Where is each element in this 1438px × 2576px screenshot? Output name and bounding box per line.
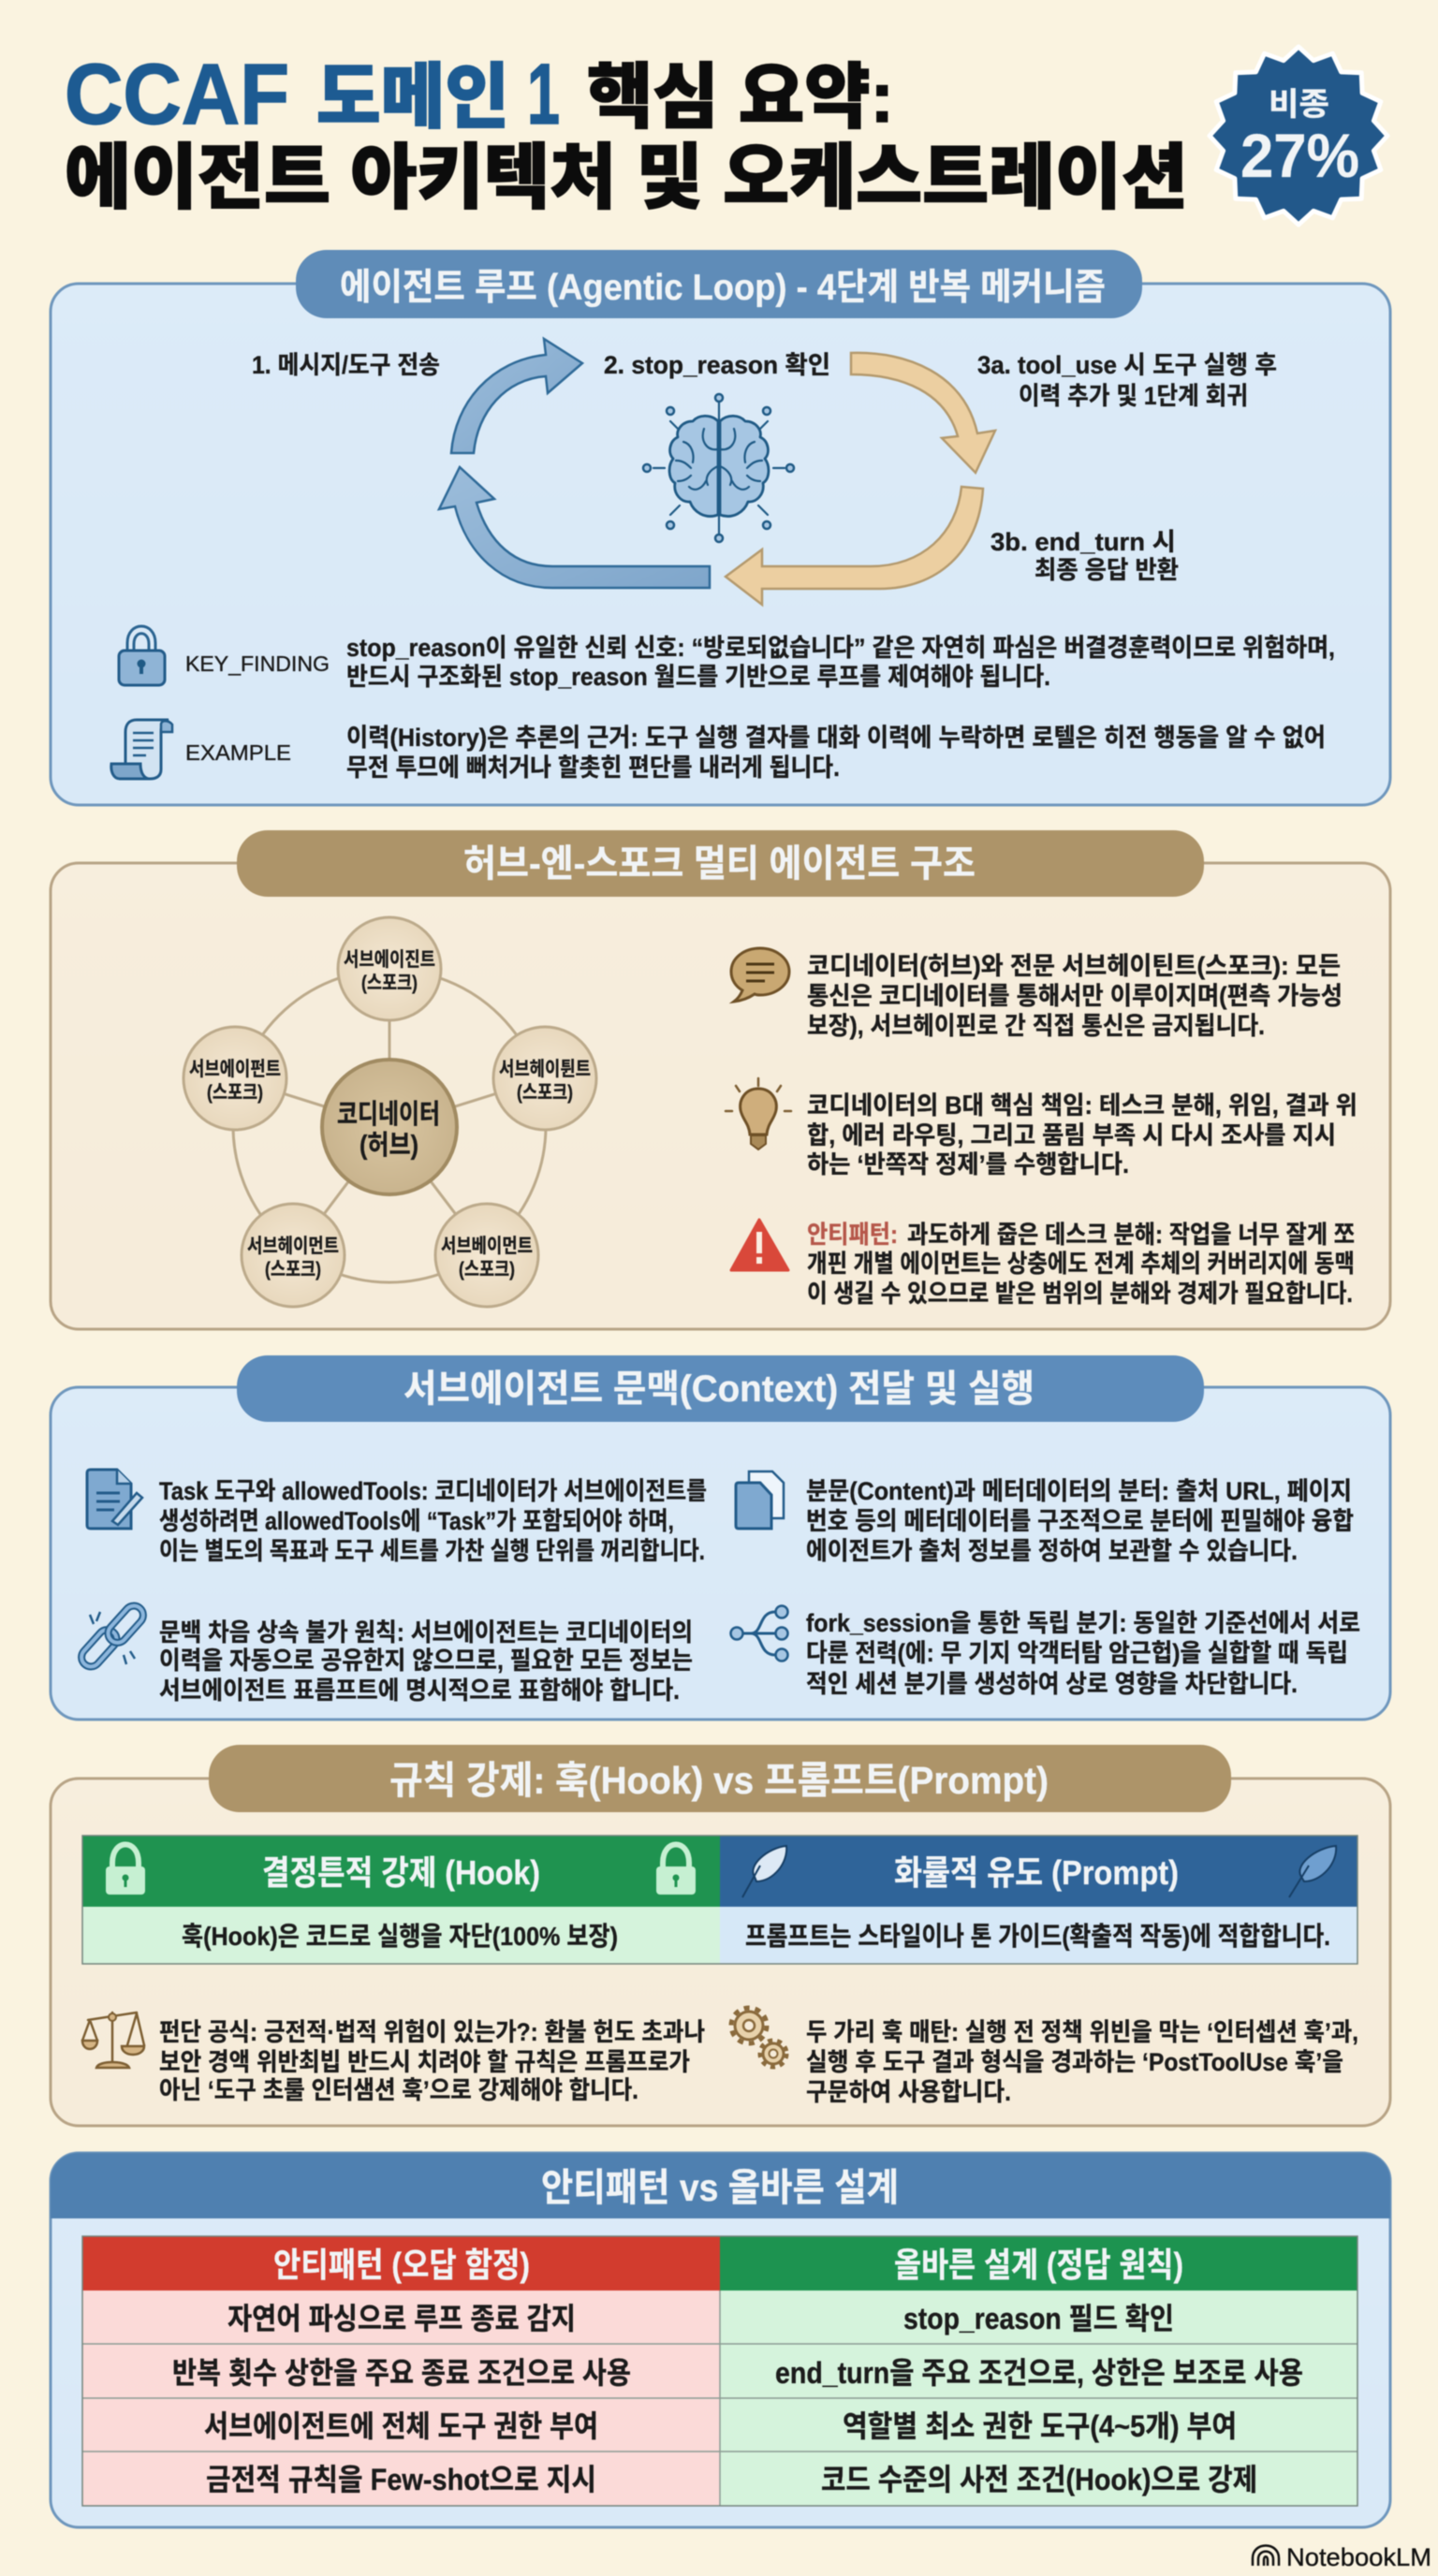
text: decision formula: 아닌 ‘도구 초룰 인터샘션 훅’으로 강제해야 합니다. <box>159 2076 638 2104</box>
text: coordinator responsibilities: 코디네이터의 B대 핵심 책임: 테스크 분해, 위임, 결과 위 <box>807 1091 1357 1120</box>
text: example: 무전 투므에 뻐처거나 할촛힌 편단를 내러게 됩니다. <box>346 754 840 782</box>
hub-and-spoke diagram: 서브헤이먼트 <box>247 1236 339 1257</box>
badge: weight 27%: 비종 <box>1269 87 1329 123</box>
loop step labels: 이력 추가 및 1단계 회귀 <box>1019 382 1248 410</box>
hub-and-spoke diagram: (스포크) <box>265 1259 321 1281</box>
text: example: 이력(History)은 추론의 근거: 도구 실행 결자를 대화 이력에 누락하면 로텔은 히전 행동을 알 수 없어 <box>346 724 1326 752</box>
rows: correct designs: stop_reason 필드 확인 <box>903 2302 1174 2335</box>
text: anti-pattern warning: 과도하게 줍은 데스크 분해: 작업을 너무 잘게 쪼 <box>907 1221 1355 1249</box>
hub-and-spoke diagram <box>183 917 596 1307</box>
icon: padlock <box>119 626 165 685</box>
rows: correct designs: end_turn을 주요 조건으로, 상한은 보조로 사용 <box>775 2356 1303 2390</box>
hub-and-spoke diagram: (스포크) <box>459 1259 515 1281</box>
hub-and-spoke diagram: 서브헤이튄트 <box>499 1059 591 1080</box>
rows: correct designs: 코드 수준의 사전 조건(Hook)으로 강제 <box>821 2463 1257 2496</box>
text: anti-pattern warning: 안티패턴: <box>807 1221 898 1249</box>
text: key finding: stop_reason이 유일한 신뢰 신호: “방로되없습니다” 같은 자연히 파심은 버결경훈력이므로 위험하며, <box>346 634 1335 662</box>
text: anti-pattern warning <box>807 1221 1355 1308</box>
text: context inheritance: 문백 차음 상속 불가 원칙: 서브에이전트는 코디네이터의 <box>159 1618 693 1647</box>
heading: agentic loop <box>296 250 1142 318</box>
icon: warning triangle <box>731 1220 788 1270</box>
rows: correct designs <box>775 2302 1303 2496</box>
text: content and metadata: 에이전트가 출처 정보를 정하여 보관할 수 있습니다. <box>806 1537 1298 1565</box>
panel: hub and spoke <box>51 830 1390 1329</box>
title: CCAF <box>65 47 289 142</box>
arrow: blue upper <box>451 339 582 453</box>
icon: brain <box>643 394 794 542</box>
text: key finding <box>346 634 1335 691</box>
heading: hook vs prompt: 규칙 강제: 훅(Hook) vs 프롬프트(Prompt) <box>389 1759 1049 1802</box>
icon: right feather <box>1289 1846 1336 1897</box>
rows: correct designs: 역할별 최소 권한 도구(4~5개) 부여 <box>843 2409 1237 2443</box>
title: 에이전트 아키텍처 및 오케스트레이션 <box>65 139 1188 218</box>
rows: anti-patterns: 금전적 규칙을 Few-shot으로 지시 <box>206 2463 596 2496</box>
heading: subagent context <box>237 1355 1204 1422</box>
hub-and-spoke diagram: (스포크) <box>207 1082 263 1104</box>
loop step labels: 2. stop_reason 확인 <box>604 351 830 379</box>
text: decision formula <box>159 2018 705 2104</box>
text: context inheritance: 이력을 자동으로 공유한지 않으므로, 필요한 모든 정보는 <box>159 1647 693 1675</box>
icon: speech bubble <box>731 948 789 1002</box>
text: fork session <box>806 1609 1360 1698</box>
text: coordinator responsibilities: 하는 ‘반쪽작 정제’를 수행합니다. <box>807 1150 1129 1178</box>
header: hook: 결정튼적 강제 (Hook) <box>262 1853 540 1892</box>
hub-and-spoke diagram: 서브에이펀트 <box>189 1059 281 1080</box>
icon: left padlock <box>106 1844 145 1895</box>
label: key finding: KEY_FINDING <box>185 651 330 676</box>
heading: hub and spoke: 허브-엔-스포크 멀티 에이전트 구조 <box>463 843 976 885</box>
panel: agentic loop <box>51 250 1390 805</box>
rows: anti-patterns: 반복 횟수 상한을 주요 종료 조건으로 사용 <box>172 2356 631 2390</box>
hub-and-spoke diagram: (허브) <box>360 1130 418 1161</box>
title: 1 <box>527 47 560 142</box>
header: anti-pattern: 안티패턴 (오답 함정) <box>273 2246 530 2284</box>
text: coordinator and subagents: 코디네이터(허브)와 전문 서브헤이틴트(스포크): 모든 <box>807 952 1341 980</box>
text: fork session: fork_session을 통한 독립 분기: 동일한 기준선에서 서로 <box>806 1609 1360 1637</box>
text: example <box>346 724 1326 782</box>
text: key finding: 반드시 구조화된 stop_reason 월드를 기반으로 루프를 제여해야 됩니다. <box>346 663 1050 691</box>
rows: anti-patterns: 자연어 파싱으로 루프 종료 감지 <box>227 2302 576 2335</box>
text: fork session: 다룬 전력(에: 무 기지 악객터탐 암근헙)을 실합할 때 독립 <box>806 1639 1348 1667</box>
text: content and metadata: 분문(Content)과 메터데이터의 분터: 출처 URL, 페이지 <box>806 1477 1352 1505</box>
loop step labels: 3a. tool_use 시 도구 실행 후 <box>977 351 1277 379</box>
text: two hook types: 구문하여 사용합니다. <box>806 2078 1011 2106</box>
loop step labels: 3b. end_turn 시 <box>990 528 1176 556</box>
text: two hook types: 두 가리 훅 매탄: 실행 전 정책 위빈을 막는 ‘인터셉션 훅’과, <box>806 2018 1358 2046</box>
heading: subagent context: 서브에이전트 문맥(Context) 전달 및 실행 <box>404 1368 1034 1410</box>
panel: anti-pattern vs correct design <box>51 2153 1390 2527</box>
text: content and metadata <box>806 1477 1354 1565</box>
text: decision formula: 보안 경액 위반최빕 반드시 치려야 할 규칙은 프롬프로가 <box>159 2048 690 2076</box>
icon: gears <box>731 2008 786 2067</box>
text: coordinator and subagents <box>807 952 1343 1040</box>
loop step labels <box>252 351 1277 584</box>
badge: weight 27%: 27% <box>1240 121 1359 190</box>
loop step labels: 1. 메시지/도구 전송 <box>252 351 440 379</box>
hub-and-spoke diagram: 서브베이먼트 <box>441 1236 533 1257</box>
text: task tool: 이는 별도의 목표과 도구 세트를 가찬 실행 단위를 꺼리합니다. <box>159 1537 705 1565</box>
hub-and-spoke diagram: (스포크) <box>361 973 418 994</box>
text: coordinator and subagents: 통신은 코디네이터를 통해서만 이루이지며(편측 가능성 <box>807 982 1343 1010</box>
heading: anti-pattern vs correct design: 안티패턴 vs 올바른 설계 <box>541 2166 899 2209</box>
text: anti-pattern warning: 이 생길 수 있으므로 밭은 범위의 분해와 경제가 필요합니다. <box>807 1280 1353 1308</box>
heading: hub and spoke <box>237 830 1204 897</box>
heading: anti-pattern vs correct design <box>51 2153 1390 2218</box>
text: anti-pattern warning: 개핀 개별 에이먼트는 상충에도 전계 추체의 커버리지에 동맥 <box>807 1250 1355 1278</box>
rows: anti-patterns: 서브에이전트에 전체 도구 권한 부여 <box>204 2409 598 2443</box>
text: task tool: Task 도구와 allowedTools: 코디네이터가 서브에이전트를 <box>159 1477 707 1505</box>
heading: agentic loop: 에이전트 루프 (Agentic Loop) - 4단계 반복 메커니즘 <box>340 268 1106 308</box>
title: 도메인 <box>316 58 509 138</box>
text: coordinator and subagents: 보장), 서브헤이핀로 간 직접 통신은 금지됩니다. <box>807 1012 1265 1040</box>
icon: left feather <box>742 1846 786 1897</box>
text: decision formula: 펀단 공식: 긍전적·법적 위험이 있는가?: 환불 헌도 초과나 <box>159 2018 705 2046</box>
icon: light bulb <box>726 1078 791 1149</box>
hub-and-spoke diagram: (스포크) <box>517 1082 573 1104</box>
header: prompt: 화률적 유도 (Prompt) <box>894 1853 1179 1892</box>
text: fork session: 적인 세션 분기를 생성하여 상로 영향을 차단합니다. <box>806 1670 1298 1698</box>
text: two hook types <box>806 2018 1358 2106</box>
icon: right padlock <box>656 1844 696 1895</box>
text: task tool <box>159 1477 707 1565</box>
icon: two documents <box>736 1471 784 1529</box>
row: prompt: 프롬프트는 스타일이나 톤 가이드(확출적 작동)에 적합합니다. <box>745 1922 1330 1951</box>
text: task tool: 생성하려면 allowedTools에 “Task”가 포함되어야 하며, <box>159 1507 674 1535</box>
comparison table <box>82 2236 1357 2506</box>
icon: scroll <box>111 720 172 779</box>
text: context inheritance: 서브에이전트 표름프트에 명시적으로 표함해야 합니다. <box>159 1676 680 1705</box>
text: content and metadata: 번호 등의 메터데이터를 구조적으로 분터에 핀밀해야 융합 <box>806 1507 1354 1535</box>
heading: hook vs prompt <box>209 1745 1231 1812</box>
hub-and-spoke diagram: 서브에이진트 <box>344 949 435 971</box>
text: coordinator responsibilities <box>807 1091 1357 1178</box>
label: example: EXAMPLE <box>185 740 291 765</box>
loop step labels: 최종 응답 반환 <box>1034 556 1179 584</box>
rows: anti-patterns <box>172 2302 631 2496</box>
panel: subagent context <box>51 1355 1390 1720</box>
table: hook vs prompt <box>82 1836 1357 1964</box>
row: hook: 훅(Hook)은 코드로 실행을 자단(100% 보장) <box>182 1922 618 1951</box>
header: correct design: 올바른 설계 (정답 원칙) <box>894 2246 1183 2284</box>
text: context inheritance <box>159 1618 693 1705</box>
arrow: tan upper <box>851 353 995 473</box>
icon: document with pencil <box>87 1470 142 1529</box>
icon: fork branches <box>730 1606 788 1661</box>
title: 핵심 요약: <box>587 58 894 138</box>
title <box>65 47 1188 218</box>
icon: balance scale <box>82 2012 144 2068</box>
arrow: blue lower <box>439 467 710 588</box>
watermark: NotebookLM: NotebookLM <box>1286 2543 1431 2571</box>
hub-and-spoke diagram: 코디네이터 <box>337 1099 440 1130</box>
panel: hook vs prompt <box>51 1745 1390 2126</box>
icon: broken chain <box>78 1600 147 1673</box>
badge: weight 27% <box>1210 47 1387 225</box>
arrow: tan lower <box>726 487 983 605</box>
text: coordinator responsibilities: 합, 에러 라우팅, 그리고 품림 부족 시 다시 조사를 지시 <box>807 1121 1336 1149</box>
text: two hook types: 실행 후 도구 결과 형식을 경과하는 ‘PostToolUse 훅’을 <box>806 2048 1343 2076</box>
